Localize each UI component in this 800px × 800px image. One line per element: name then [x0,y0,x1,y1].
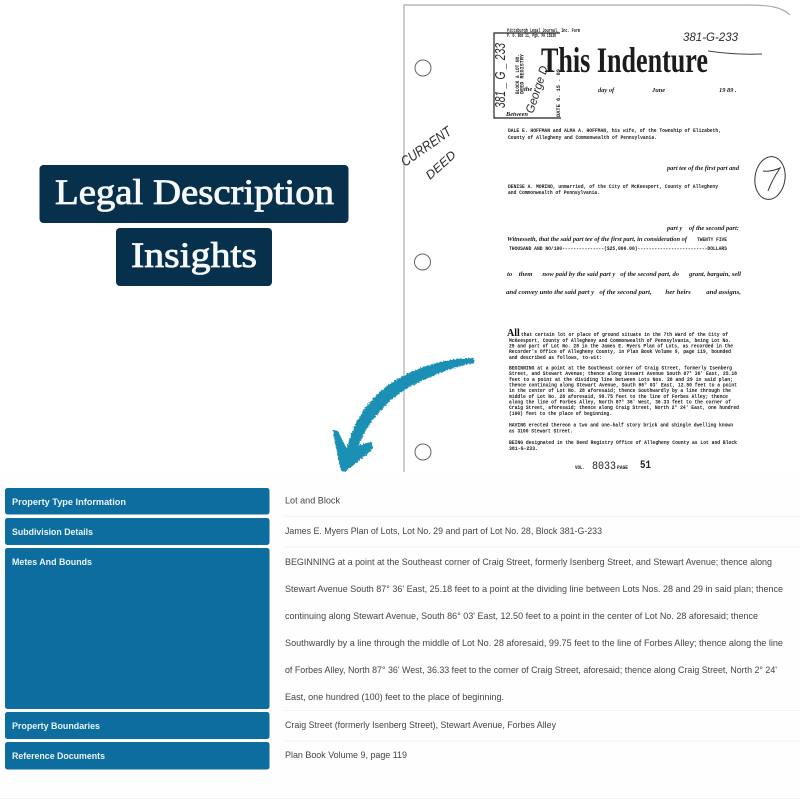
metes and bounds paragraph: Craig Street, aforesaid; thence along Craig Street, North 2° 24' East, one hundred [509,405,739,411]
consideration text: to them now paid by the said part y of the second part, do grant, bargain, sell [507,271,741,278]
row: subdivision details: Subdivision Details [12,527,93,538]
date line [524,86,737,94]
metes and bounds paragraph [509,366,739,417]
parties text: and Commonwealth of Pennsylvania. [508,190,600,196]
deed registry stamp: Between [505,111,528,118]
metes and bounds paragraph: along the line of Forbes Alley, North 87° 36' West, 36.33 feet to the corner of [509,400,731,406]
handwritten note: current deed: DEED [423,147,459,182]
row: property boundaries: Property Boundaries [12,721,100,732]
consideration text: and convey unto the said part y of the second part, her heirs and assigns, [506,289,741,296]
row: metes and bounds: Stewart Avenue South 87° 36' East, 25.18 feet to a point at the dividing line between Lots Nos. 28 and 29 in said plan; thence [285,584,783,594]
legal description paragraph: and described as follows, to-wit: [509,355,602,361]
date line: day of [598,87,615,94]
punched holes [414,60,431,460]
title: Legal Description Insights [40,165,348,286]
metes and bounds paragraph: middle of Lot No. 28 aforesaid, 99.75 feet to the line of Forbes Alley; thence [509,394,728,400]
row: subdivision details: James E. Myers Plan of Lots, Lot No. 29 and part of Lot No. 28, Block 381-G-233 [285,526,602,536]
dwelling paragraph [509,422,733,434]
title pill: Legal Description: Legal Description [55,172,334,212]
volume and page number: PAGE [617,465,628,471]
table: property legal description [0,475,800,800]
row: property type information: Property Type Information [12,497,126,508]
legal description paragraph: 29 and part of Lot No. 28 in the James E. Myers Plan of Lots, as recorded in the [509,344,733,350]
date line: the [524,86,532,93]
parties text [508,128,740,232]
volume and page number: VOL. [575,465,585,471]
title pill: Insights [116,228,272,286]
row: metes and bounds: East, one hundred (100) feet to the place of beginning. [285,692,504,702]
volume and page number: 8033 [592,461,616,473]
legal description paragraph: that certain lot or place of ground situate in the 7th Ward of the City of [521,332,728,338]
consideration text: Witnesseth, that the said part tee of the first part, in consideration of [507,236,688,243]
row: metes and bounds: Southwardly by a line through the middle of Lot No. 28 aforesaid, 99.75 feet to the line of Forbes Alley; thence along the line [285,638,783,648]
title pill: Legal Description [40,165,348,223]
row: metes and bounds: BEGINNING at a point at the Southeast corner of Craig Street, formerly Isenberg Street, and Stewart Avenue; thence along [285,557,772,567]
row: subdivision details [5,518,602,545]
volume and page number: 51 [640,460,651,472]
handwritten circled number [752,155,788,201]
parties text: part y of the second part: [666,225,739,232]
deed registry paragraph: BEING designated in the Deed Registry Office of Allegheny County as Lot and Block [509,440,737,446]
metes and bounds paragraph: feet to a point at the dividing line between Lots Nos. 28 and 29 in said plan; [509,377,733,383]
legal description paragraph: Recorder's Office of Allegheny County, in Plan Book Volume 9, page 119, bounded [509,349,731,355]
deed page edge [404,5,790,472]
row: property type information: Lot and Block [285,496,340,506]
arrow: hand-drawn teal arrow pointing to the table [333,358,474,472]
handwritten note: current deed: CURRENT [398,122,455,169]
deed registry stamp: George D. [523,61,552,115]
row: reference documents [5,742,407,770]
deed registry stamp: DEED REGISTRY [520,53,526,94]
parties text: part tee of the first part and [666,165,740,172]
metes and bounds paragraph: thence continuing along Stewart Avenue, South 86° 03' East, 12.50 feet to a point [509,382,737,388]
deed registry stamp: 381 _ G _ 233 [492,43,509,108]
row: metes and bounds: continuing along Stewart Avenue, South 86° 03' East, 12.50 feet to a point in the center of Lot No. 28 aforesaid; thence [285,611,758,621]
deed registry stamp: Pittsburgh Legal Journal, Inc. Form [507,28,580,34]
row: reference documents: Plan Book Volume 9, page 119 [285,750,407,760]
handwritten note: current deed [398,122,459,182]
parties text: County of Allegheny and Commonwealth of Pennsylvania. [508,135,657,141]
deed registry stamp: BLOCK & LOT NO. [515,54,521,94]
metes and bounds paragraph: in the center of Lot No. 28 aforesaid; thence Southwardly by a line through the [509,388,731,394]
date line: 19 89 . [719,87,737,94]
consideration text: THOUSAND AND NO/100---------------($25,000.00)-------------------------DOLLARS [509,246,727,252]
consideration text: TWENTY FIVE [697,237,727,243]
deed registry stamp: DATE 6. 15 . 89 [556,69,562,117]
panel: scanned deed document [398,5,790,473]
title pill: Insights: Insights [131,235,257,275]
row: property boundaries [5,712,556,739]
deed registry stamp: P. O. Box 11, Pgh. PA 15230 [507,33,556,39]
parties text: DALE E. HOFFMAN and ALMA A. HOFFMAN, his wife, of the Township of Elizabeth, [508,128,721,134]
deed registry paragraph: 381-G-233. [509,446,538,452]
legal description paragraph: McKeesport, County of Allegheny and Commonwealth of Pennsylvania, being Lot No. [509,338,731,344]
handwritten reference number [683,32,762,54]
row: property boundaries: Craig Street (formerly Isenberg Street), Stewart Avenue, Forbes Alley [285,720,556,730]
handwritten reference number: 381-G-233 [683,32,739,44]
consideration text [506,236,741,296]
deed registry stamp [492,28,580,118]
row: metes and bounds: of Forbes Alley, North 87° 36' West, 36.33 feet to the corner of Craig Street, aforesaid; thence along Craig Street, North 2° 24' [285,665,777,675]
row: metes and bounds [5,548,783,709]
metes and bounds paragraph: BEGINNING at a point at the Southeast corner of Craig Street, formerly Isenberg [509,366,732,372]
date line: June [651,87,665,94]
volume and page number [575,460,651,473]
deed registry paragraph [509,440,737,452]
row: property type information [5,488,340,514]
parties text: DENISE A. MORINO, unmarried, of the City of McKeesport, County of Allegheny [508,184,719,190]
legal description paragraph [507,328,733,361]
dwelling paragraph: HAVING erected thereon a two and one-half story brick and shingle dwelling known [509,422,733,428]
row: metes and bounds: Metes And Bounds [12,557,92,568]
metes and bounds paragraph: Street, and Stewart Avenue; thence along Stewart Avenue South 87° 36' East, 25.18 [509,371,737,377]
row: reference documents: Reference Documents [12,751,105,762]
metes and bounds paragraph: (100) feet to the place of beginning. [509,411,612,417]
deed title: This Indenture [541,40,708,80]
dwelling paragraph: as 3100 Stewart Street. [509,428,573,434]
legal description paragraph: All [507,328,520,339]
